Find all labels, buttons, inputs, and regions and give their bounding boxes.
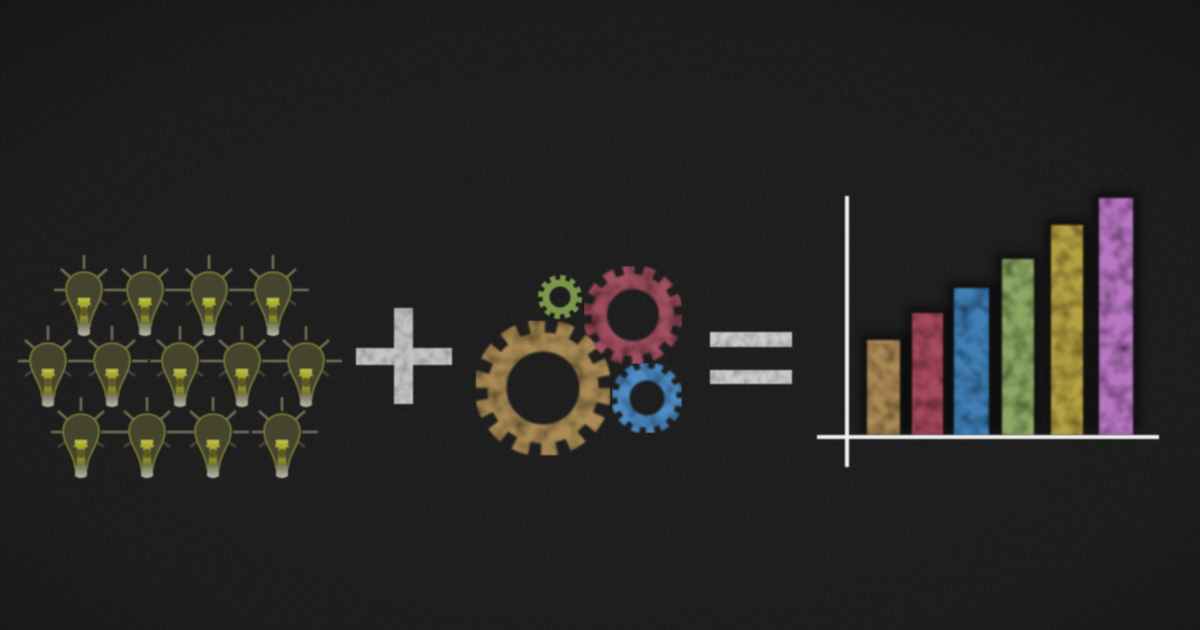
chart axes bbox=[817, 196, 1159, 467]
icon: large orange gear bbox=[482, 327, 604, 449]
icon: bulb row 3 bbox=[51, 397, 318, 478]
bar: yellow bbox=[1051, 225, 1083, 435]
icon group: gears bbox=[482, 270, 678, 449]
icon: green gear bbox=[541, 278, 579, 316]
icon: bulb row 1 bbox=[54, 255, 309, 336]
bar: orange bbox=[867, 340, 900, 435]
icon: red gear bbox=[588, 270, 678, 360]
icon: bulb row 2 bbox=[18, 326, 342, 407]
icon: blue gear bbox=[616, 366, 678, 430]
plus sign bbox=[356, 308, 452, 404]
bar: purple bbox=[1099, 198, 1133, 435]
bars bbox=[867, 198, 1133, 435]
icon group: light bulbs bbox=[18, 255, 342, 478]
bar: blue bbox=[954, 288, 989, 435]
bar chart bbox=[817, 192, 1159, 467]
bar: green bbox=[1002, 259, 1034, 435]
bar: red bbox=[912, 313, 943, 435]
equals sign bbox=[710, 332, 792, 384]
